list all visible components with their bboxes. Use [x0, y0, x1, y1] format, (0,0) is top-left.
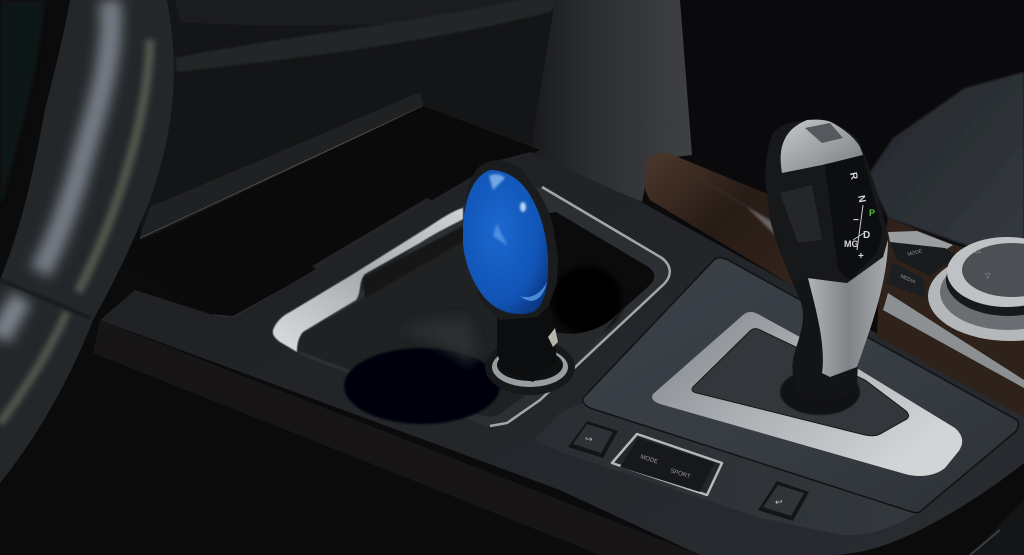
centre console body — [100, 152, 1024, 555]
front cup well — [344, 348, 500, 424]
dark inner area — [0, 0, 45, 210]
selector lower body — [770, 220, 858, 401]
lower front band — [0, 353, 600, 555]
gear letters: D — [863, 230, 870, 241]
rear cup well area — [540, 212, 654, 356]
tray around shifter — [583, 258, 1018, 513]
idrive buttons — [886, 231, 958, 298]
gear letters: + — [858, 251, 864, 262]
dashboard panel — [140, 0, 565, 240]
shift gate inner panel — [692, 329, 909, 436]
moulded divider highlight — [400, 318, 478, 365]
metal contact — [548, 328, 558, 347]
gear selector — [765, 120, 888, 401]
console buttons — [568, 421, 618, 458]
silver lid handle — [312, 198, 437, 272]
idrive rotary controller — [928, 237, 1024, 341]
glossy display panel — [825, 155, 883, 280]
gear letters: P — [869, 208, 875, 218]
gear letters: N — [855, 194, 867, 204]
upper right dark cabin — [680, 0, 1024, 260]
wood trim — [645, 152, 795, 287]
cigarette lighter socket ring — [485, 339, 575, 395]
steering wheel — [0, 0, 174, 483]
button: left — [568, 421, 618, 458]
lid edge line — [213, 272, 314, 317]
selector cap silver — [781, 120, 863, 173]
rim seam — [0, 280, 90, 318]
photo scene: car centre console: ↩ — [775, 497, 783, 507]
wedge below rear well — [552, 312, 620, 372]
passenger seat — [868, 72, 1024, 250]
charger stem — [497, 305, 557, 382]
wood trim right section — [877, 218, 1024, 417]
gear letters — [844, 171, 875, 262]
button: right — [758, 481, 809, 521]
shifter boot well — [780, 369, 860, 415]
console buttons: ↪ — [585, 434, 593, 444]
button strip — [535, 402, 918, 535]
blue ovoid charger — [463, 160, 558, 382]
dark stowage lid — [133, 106, 540, 317]
wheel rim — [0, 0, 174, 483]
cupholder frame — [297, 187, 670, 427]
gear letters: R — [847, 171, 860, 181]
blue-grey highlight — [40, 0, 111, 272]
silver rim highlight — [273, 208, 463, 352]
blue gloss face — [463, 170, 548, 314]
cap release button — [805, 123, 843, 143]
selector silver sleeve — [808, 240, 888, 377]
photo scene: car centre console: MODE — [639, 454, 658, 465]
black housing — [463, 160, 558, 320]
idrive rotary controller: △ — [975, 247, 981, 254]
green-grey edge highlight — [78, 40, 150, 292]
silver rail — [883, 293, 1024, 388]
selector head black — [765, 120, 888, 283]
textured grey pillar — [530, 0, 692, 202]
side unlock button — [780, 185, 822, 243]
idrive buttons: MODE — [907, 248, 924, 258]
idrive buttons: MEDIA — [899, 273, 917, 286]
lower rim highlights — [0, 298, 22, 338]
gear letters: MG — [844, 239, 858, 249]
idrive rotary controller: ▽ — [985, 273, 991, 280]
bottom right trim — [970, 500, 1024, 555]
cupholder interior — [297, 212, 654, 417]
silver shift gate bezel — [652, 312, 962, 476]
gear letters: − — [853, 215, 859, 226]
cupholder right silver line — [490, 187, 670, 426]
button group: silver bezel — [612, 434, 722, 495]
photo scene: car centre console: SPORT — [669, 468, 691, 480]
